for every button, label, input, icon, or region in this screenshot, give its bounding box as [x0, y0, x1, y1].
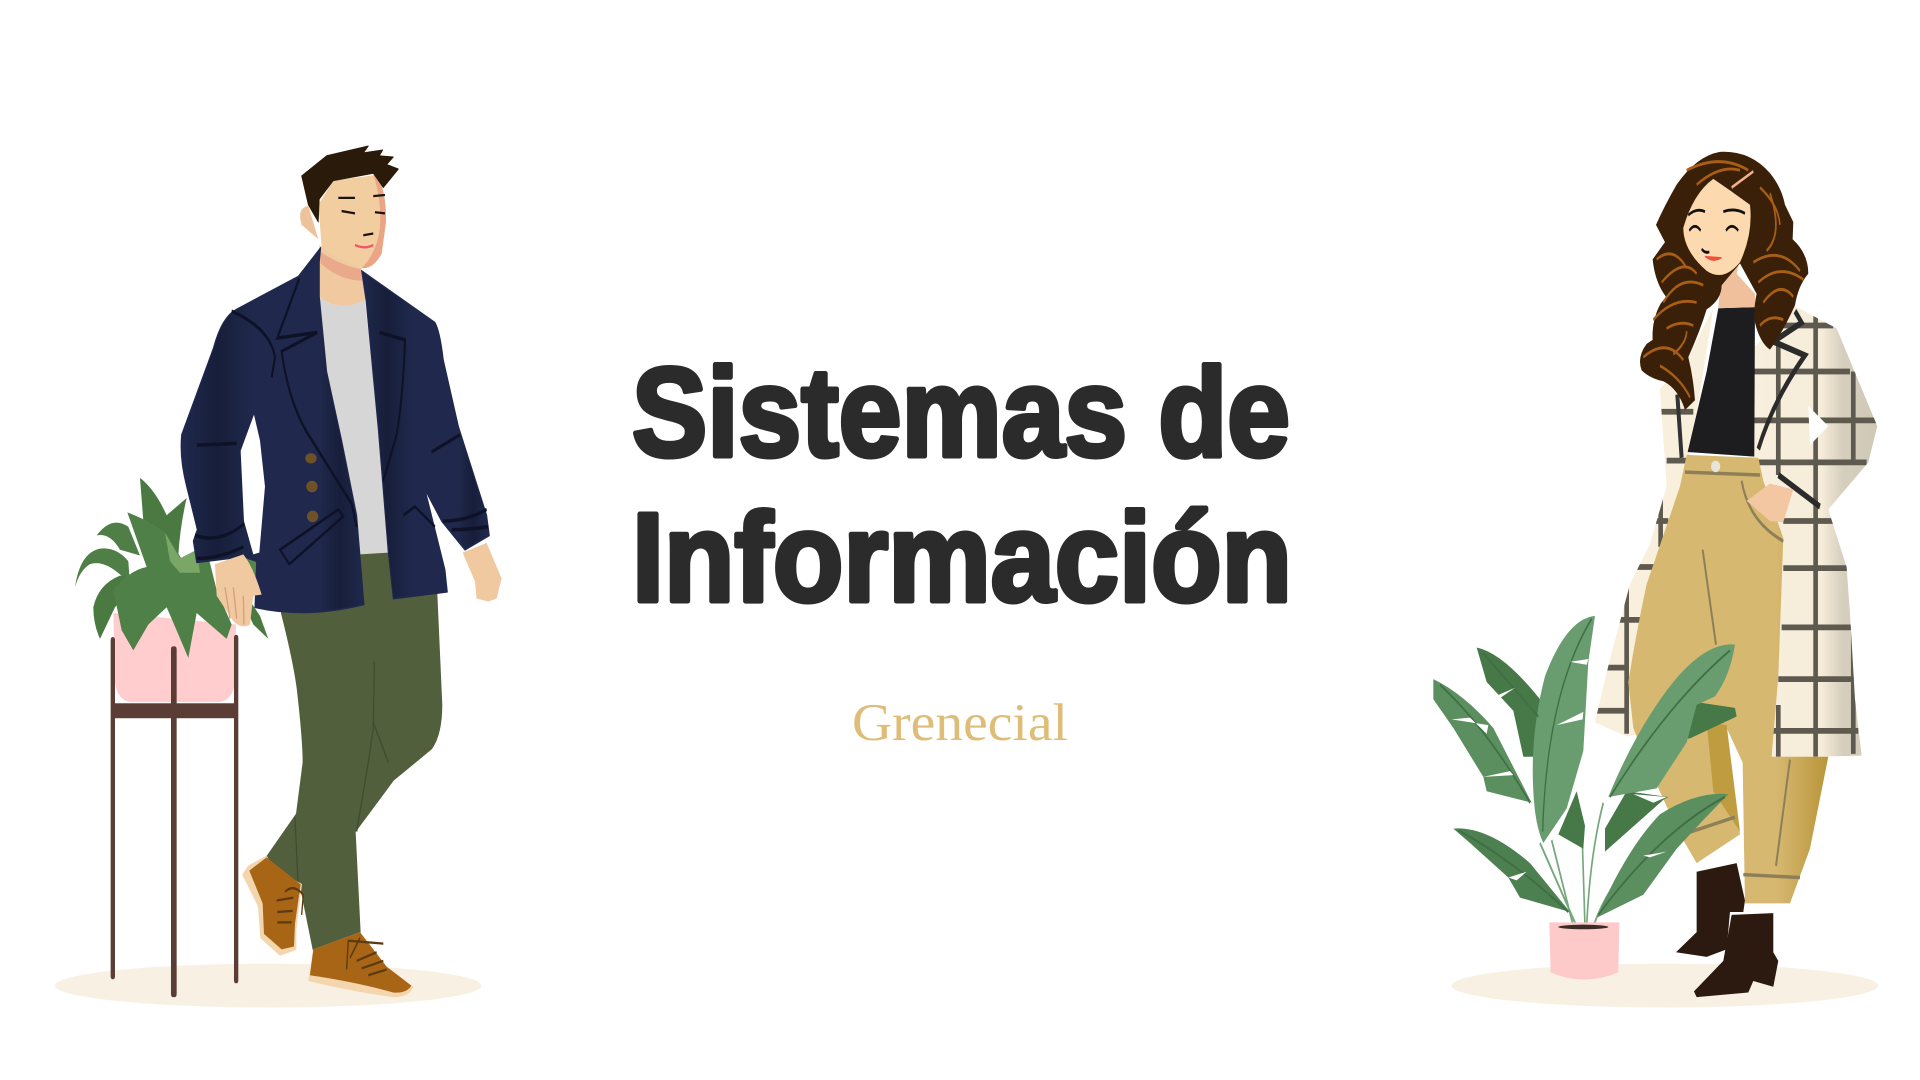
title	[632, 342, 1292, 628]
floor shadow: man	[55, 964, 482, 1007]
neck shadow	[321, 252, 362, 281]
jacket	[181, 248, 364, 612]
hair clip	[1732, 171, 1753, 188]
big right leaf	[1608, 644, 1735, 797]
plant leaves	[75, 478, 268, 658]
trousers shading	[1707, 722, 1740, 832]
neck	[1718, 259, 1755, 308]
jacket buttons	[305, 453, 318, 522]
pot opening	[1558, 925, 1608, 929]
hair	[1640, 152, 1808, 410]
jacket pocket right	[403, 507, 435, 527]
coat	[1595, 305, 1877, 758]
floor shadow: woman	[1452, 964, 1878, 1007]
subtitle: Grenecial	[852, 694, 1068, 752]
coat left panel	[1595, 308, 1720, 737]
hair	[302, 146, 398, 222]
plant stand pot	[113, 613, 236, 702]
right shoe	[308, 932, 413, 997]
belt button	[1711, 461, 1720, 472]
lower right leaf	[1597, 794, 1728, 918]
jacket pocket left	[280, 510, 343, 564]
left shoe	[243, 856, 302, 955]
big centre leaf	[1533, 616, 1595, 843]
illustration: man with potted plant	[55, 146, 502, 1007]
neck	[319, 245, 366, 306]
right shoe laces	[347, 938, 387, 975]
coat fill	[1753, 305, 1877, 758]
plant stand	[111, 635, 238, 997]
front boot	[1694, 913, 1778, 997]
left fingers	[225, 587, 244, 624]
back leaf	[1477, 648, 1540, 757]
facial features	[338, 195, 385, 235]
left shoe upper	[249, 857, 301, 949]
trousers	[1628, 455, 1828, 903]
hair highlights	[1643, 162, 1803, 397]
mouth	[1705, 256, 1722, 260]
right shoe upper	[310, 932, 411, 993]
pants	[267, 553, 442, 949]
leaf veins	[1440, 619, 1730, 915]
plant stems	[1540, 803, 1627, 926]
back boot	[1676, 863, 1745, 957]
facial features	[1688, 210, 1745, 252]
face blush	[362, 175, 386, 268]
left shoe laces	[277, 888, 303, 922]
mouth	[355, 245, 373, 247]
title line 1: Sistemas de	[632, 342, 1290, 483]
left leaf	[1433, 679, 1532, 803]
title line 2: Información	[632, 487, 1292, 628]
banana plant	[1433, 616, 1737, 980]
bottom left leaf	[1453, 828, 1570, 912]
pants crease lines	[295, 662, 388, 889]
jacket lapels and seams	[195, 278, 488, 558]
trousers seams	[1683, 472, 1800, 878]
leaf highlights	[1452, 659, 1667, 880]
ear	[300, 206, 318, 239]
jacket right side and sleeve	[362, 271, 489, 599]
t-shirt	[319, 297, 388, 554]
small centre leaf	[1558, 791, 1585, 849]
coat gap	[1808, 406, 1828, 445]
plant pot	[1549, 922, 1619, 980]
coat lapel	[1758, 311, 1820, 507]
right hand	[463, 543, 502, 602]
black top	[1688, 307, 1755, 457]
gap between arm and torso	[241, 415, 265, 554]
face	[1683, 179, 1751, 275]
dark leaf band	[1650, 702, 1737, 742]
coat plaid	[1597, 311, 1877, 757]
illustration: woman with banana plant	[1433, 152, 1878, 1007]
hand in pocket	[1747, 484, 1793, 522]
left hand	[215, 554, 262, 626]
face	[318, 175, 386, 268]
dark right under leaf	[1605, 791, 1668, 852]
